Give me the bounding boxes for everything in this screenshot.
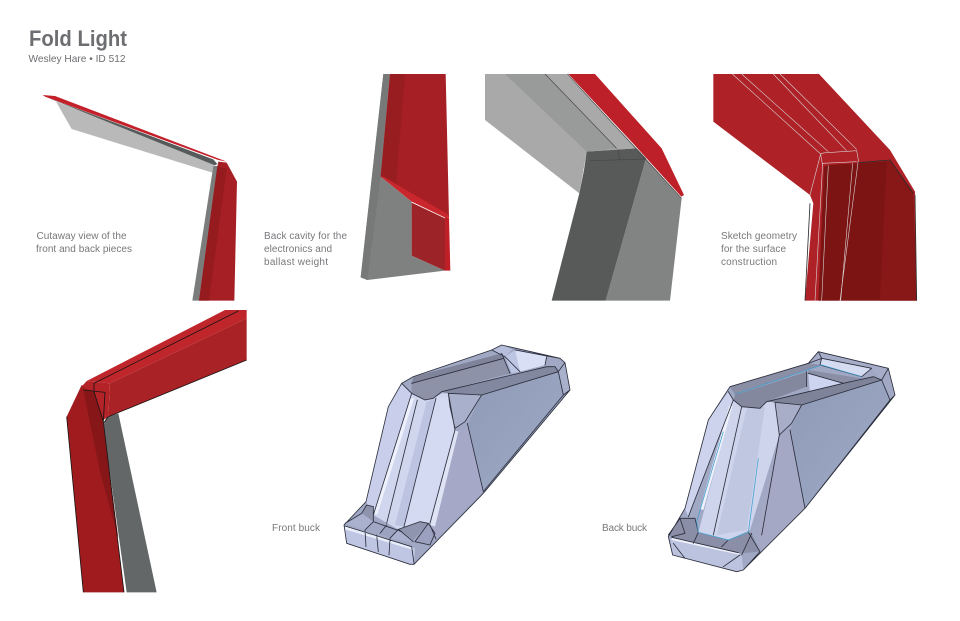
back opening [808, 373, 843, 393]
bright red arm top [87, 310, 247, 383]
red top strip [43, 95, 227, 162]
panel: rear view render [485, 74, 684, 301]
caption: back buck: Back buck [602, 523, 648, 534]
lower side face [431, 427, 483, 539]
caption: sketch geometry: Sketch geometry [721, 231, 797, 242]
mid grey arm band [505, 74, 617, 152]
thin edge lines [545, 74, 682, 198]
title: Fold Light [29, 26, 128, 51]
right ridge [767, 377, 882, 405]
left facet [366, 383, 412, 515]
dark red front face [818, 161, 917, 301]
black edge lines [805, 160, 917, 301]
right light stripe [404, 397, 454, 527]
base top left [345, 513, 373, 530]
underside strip [430, 390, 570, 545]
right side face [467, 372, 563, 492]
front centre panel [698, 400, 779, 540]
red arm front [108, 318, 247, 417]
bright red fold strip [381, 177, 449, 218]
left facet [685, 392, 733, 517]
reflector grey inner surface [56, 102, 215, 173]
inner frame [820, 358, 872, 377]
base white strip [672, 537, 741, 555]
red stand [67, 385, 124, 592]
panel: back cavity render [361, 74, 450, 280]
trough upper band [412, 353, 504, 383]
dark model lines [67, 311, 247, 592]
caption: front buck: Front buck [272, 523, 321, 534]
grey rear stand [103, 413, 157, 592]
far rim top [502, 345, 560, 358]
back trough left strip [505, 350, 520, 373]
grey stand section [192, 166, 218, 301]
subtitle: Wesley Hare • ID 512 [28, 53, 126, 65]
title block [28, 26, 128, 65]
base front [670, 538, 743, 572]
right ridge [442, 367, 558, 395]
base front [344, 528, 415, 564]
dark edge of the arm [43, 96, 217, 165]
darker grey side strip [361, 74, 389, 280]
lighter right part of face [880, 161, 917, 301]
dark red stand fold [83, 390, 118, 538]
far rim left wedge [492, 345, 513, 357]
icon: front buck model [344, 345, 570, 564]
dark red side of stand [199, 167, 227, 301]
panel: sketch geometry render [713, 74, 917, 301]
highlight strip [430, 430, 458, 527]
base top front right [390, 529, 413, 542]
sketch lines [732, 74, 858, 301]
buck silhouette [668, 352, 895, 572]
gusset [775, 402, 802, 435]
far right rim [545, 357, 565, 372]
caption: cutaway view: Cutaway view of the [36, 231, 127, 242]
panel: front three-quarter render [67, 310, 247, 592]
caption: back cavity: Back cavity for the [264, 231, 347, 242]
centre darker stripe [395, 398, 436, 527]
model lines [344, 345, 570, 564]
red stand body [199, 162, 237, 301]
caption: back cavity: ballast weight [264, 257, 328, 268]
caption: cutaway view: front and back pieces [36, 244, 132, 255]
trough wall [412, 358, 510, 400]
red body [713, 74, 917, 301]
model lines [668, 352, 895, 572]
frame rear band [808, 370, 862, 383]
far rim [808, 352, 888, 380]
blue sketch lines [697, 365, 862, 540]
base top slab [668, 518, 760, 553]
red right strip [445, 217, 450, 271]
caption: sketch geometry: construction [721, 257, 777, 268]
base white strip [345, 526, 413, 550]
icon: back buck model [668, 352, 895, 572]
lower red cavity wall [412, 203, 445, 271]
gusset [448, 393, 482, 428]
right rim side [558, 363, 570, 395]
caption: back cavity: electronics and [264, 244, 332, 255]
front centre panel [373, 393, 455, 532]
dark grey stand face [552, 148, 646, 301]
trough upper wall [730, 363, 822, 395]
right grey stand face [606, 148, 682, 301]
red main panel [381, 74, 449, 217]
base top mid a [365, 522, 387, 533]
left white stripe [373, 398, 414, 514]
grey cavity body [361, 74, 445, 280]
back trough light [515, 350, 547, 372]
dark red inner shading [381, 74, 405, 184]
base top mid b [380, 525, 398, 538]
left white stripe [700, 406, 733, 510]
right side face [790, 380, 890, 508]
trough floor [733, 372, 807, 408]
buck silhouette [344, 345, 570, 564]
lower side face [757, 430, 805, 552]
left pocket base [362, 505, 373, 522]
centre stripe [717, 407, 765, 535]
right pocket base [398, 522, 428, 540]
red top face [568, 74, 684, 197]
caption: sketch geometry: for the surface [721, 244, 786, 255]
base right side [415, 523, 435, 545]
corner fold [82, 381, 110, 420]
far right side [882, 368, 895, 400]
light grey arm [485, 74, 637, 193]
panel: cutaway view render [43, 95, 237, 301]
